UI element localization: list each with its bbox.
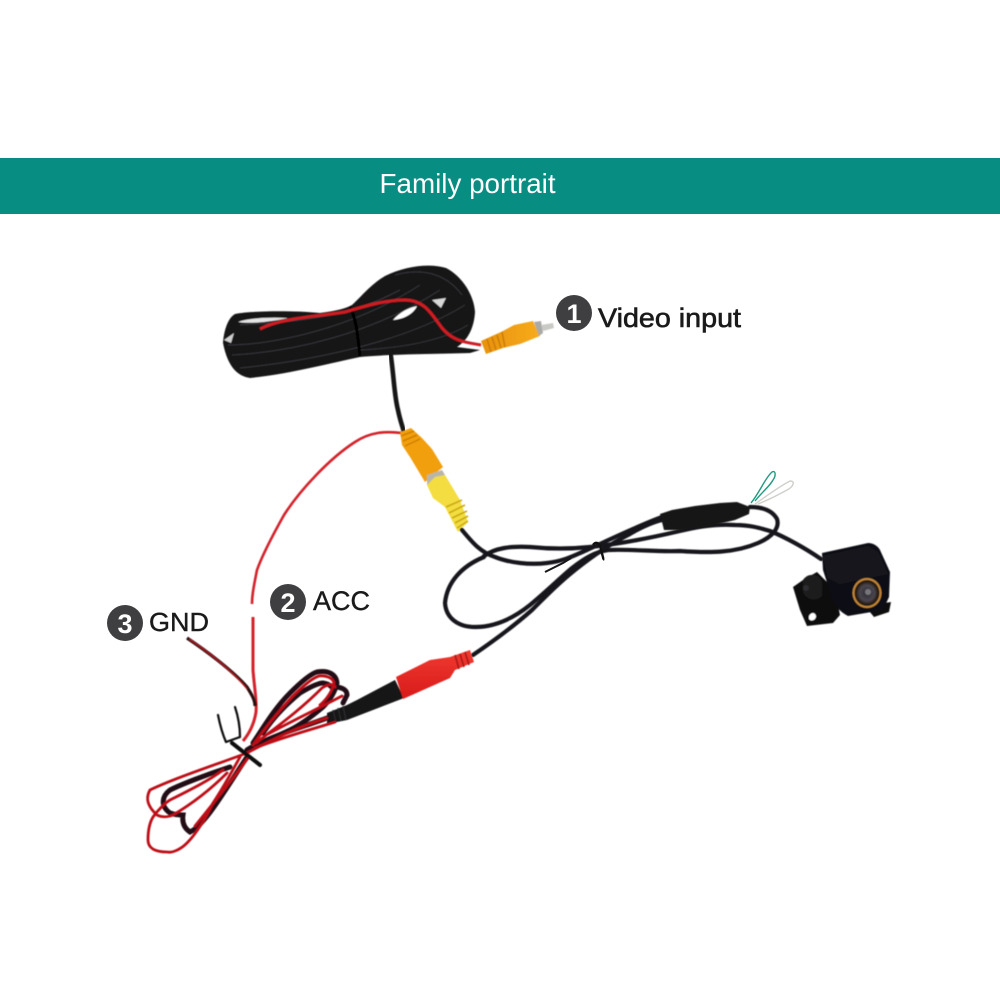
coiled video cable — [223, 266, 481, 378]
camera harness cables — [445, 507, 821, 655]
red power connector — [327, 650, 474, 724]
label: GND: GND — [149, 607, 209, 637]
cable tie on bundle — [232, 743, 260, 765]
dark wire strands — [163, 671, 347, 832]
loose thin wires: green and white — [751, 472, 793, 504]
red wire strands — [148, 676, 342, 852]
red and black figure-eight wire bundle — [148, 671, 347, 852]
header banner — [0, 158, 1000, 214]
label: video input: Video input — [598, 303, 742, 333]
coil gaps — [393, 306, 417, 320]
RCA plug: video input — [481, 321, 554, 354]
GND wire — [187, 638, 255, 706]
inline junction — [660, 502, 750, 530]
callout 3: GND: 3 — [117, 609, 133, 639]
RCA coupler: orange and yellow — [400, 428, 468, 532]
callout 3: GND — [107, 605, 209, 641]
callout 1: video input — [556, 295, 742, 333]
callout 2: ACC — [270, 584, 370, 620]
label: ACC: ACC — [313, 586, 370, 616]
camera — [793, 543, 891, 626]
red wire over coil — [260, 300, 481, 345]
ACC red wire — [243, 432, 402, 741]
mounting bracket — [793, 572, 840, 626]
cable tie on harness — [593, 543, 603, 560]
banner title: Family portrait — [380, 168, 556, 199]
cable tie on coil — [350, 307, 360, 356]
black cable to coupler — [390, 350, 404, 432]
callout 2: ACC: 2 — [280, 588, 296, 618]
camera body — [822, 543, 890, 616]
callout 1: video input: 1 — [566, 299, 582, 329]
lens — [852, 578, 882, 608]
